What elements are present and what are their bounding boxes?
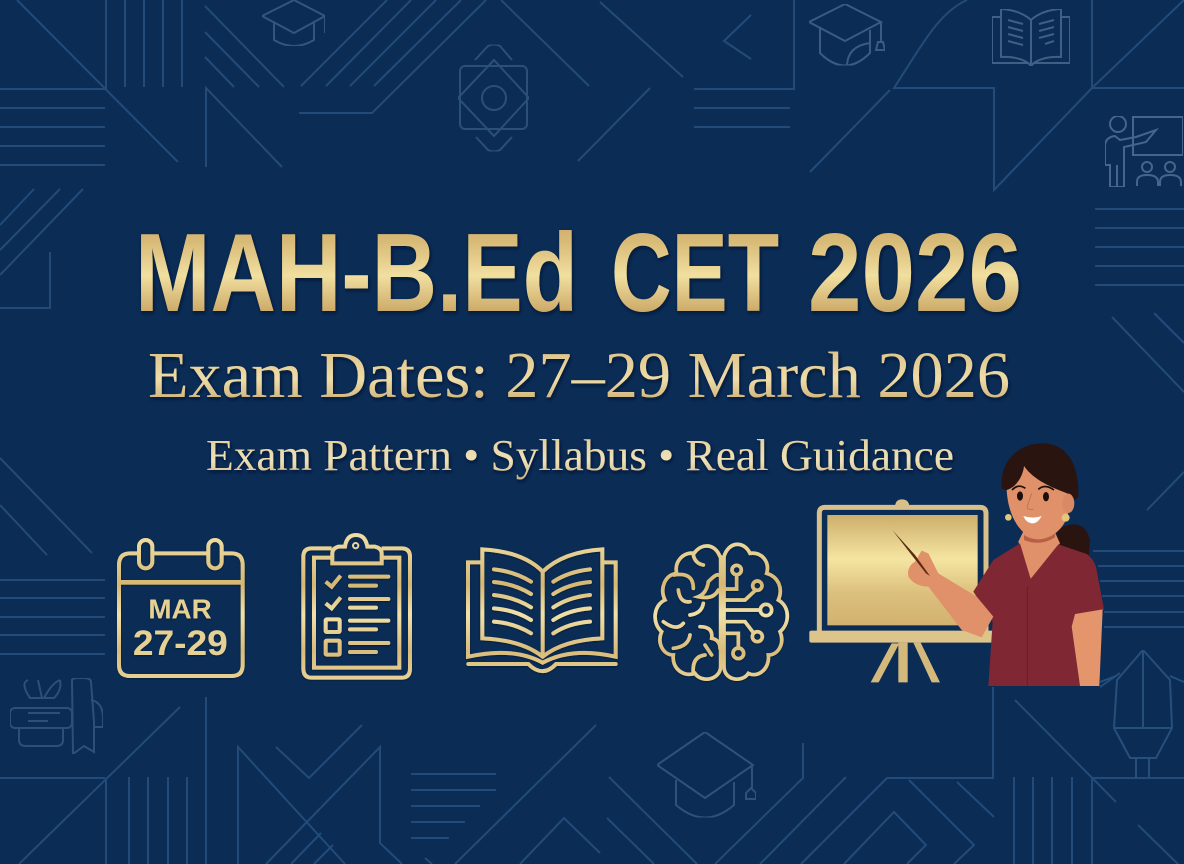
background icon: graduation cap top	[262, 0, 325, 46]
background icon: teacher at board	[1105, 116, 1183, 187]
icon: brain with circuits	[655, 544, 787, 679]
title: 2026	[808, 211, 1022, 335]
teacher	[892, 443, 1104, 686]
icon: open book	[468, 549, 616, 671]
calendar text MAR: MAR	[148, 593, 212, 624]
background icon: pen nib	[1100, 650, 1184, 778]
background icon: diploma and gift	[10, 678, 103, 754]
tagline: Exam Pattern • Syllabus • Real Guidance	[206, 431, 954, 480]
easel	[809, 499, 994, 682]
background icon: graduation cap upper right	[809, 4, 885, 66]
title	[135, 211, 1022, 335]
calendar text 27-29: 27-29	[133, 624, 228, 663]
title: MAH-B.Ed	[135, 211, 578, 335]
subtitle: exam dates: Exam Dates: 27–29 March 2026	[148, 339, 1010, 412]
icon: calendar MAR 27-29	[119, 540, 243, 676]
illustration: presentation easel and teacher	[809, 443, 1104, 686]
title: CET	[611, 211, 779, 335]
background icon: open book	[992, 9, 1070, 66]
background icon: graduation cap bottom	[657, 732, 756, 818]
icon: clipboard checklist	[303, 535, 410, 678]
background icon: atom	[458, 44, 529, 152]
